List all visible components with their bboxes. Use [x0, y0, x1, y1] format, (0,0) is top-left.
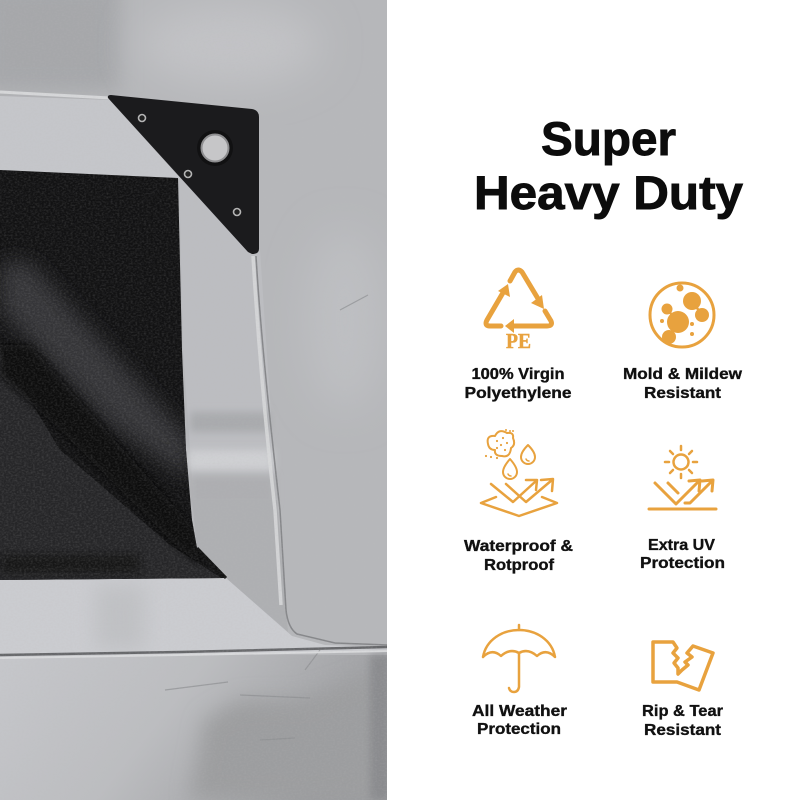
- icon: sun and UV deflection: [649, 446, 716, 509]
- label: Mold and Mildew Resistant: Resistant: [644, 385, 721, 402]
- label: Extra UV Protection: Protection: [640, 555, 725, 572]
- label: 100% Virgin Polyethylene: [464, 366, 572, 402]
- label: Waterproof and Rotproof: Waterproof &: [464, 538, 573, 555]
- photo: silver and black tarp corner: [0, 0, 390, 800]
- title: Heavy Duty: [474, 166, 743, 219]
- title: [474, 112, 743, 219]
- title: Super: [541, 112, 676, 165]
- label: 100% Virgin Polyethylene: Polyethylene: [464, 385, 572, 402]
- label: All Weather Protection: All Weather: [472, 703, 567, 720]
- icon: mold and mildew petri dish: [650, 283, 714, 347]
- label: Extra UV Protection: Extra UV: [648, 537, 716, 554]
- label: Rip and Tear Resistant: [642, 703, 723, 739]
- label: All Weather Protection: [472, 703, 567, 738]
- label: Rip and Tear Resistant: Resistant: [644, 722, 721, 739]
- label: Extra UV Protection: [640, 537, 725, 572]
- label: Mold and Mildew Resistant: [623, 366, 743, 402]
- label: Waterproof and Rotproof: Rotproof: [484, 557, 555, 574]
- icon: recycling triangle PE: PE: [506, 329, 531, 353]
- icon: waterproof and rotproof: [481, 429, 557, 516]
- main grommet: [197, 130, 233, 166]
- label: Rip and Tear Resistant: Rip & Tear: [642, 703, 723, 720]
- label: Waterproof and Rotproof: [464, 538, 573, 574]
- label: Mold and Mildew Resistant: Mold & Mildew: [623, 366, 743, 383]
- black panel: [0, 165, 240, 590]
- label: All Weather Protection: Protection: [477, 721, 561, 738]
- icon: recycling triangle PE: [486, 270, 552, 353]
- icon: rip and tear: [653, 642, 713, 690]
- icon: umbrella: [483, 625, 555, 692]
- label: 100% Virgin Polyethylene: 100% Virgin: [472, 366, 564, 383]
- corner reinforcement patch with grommets: [108, 95, 259, 254]
